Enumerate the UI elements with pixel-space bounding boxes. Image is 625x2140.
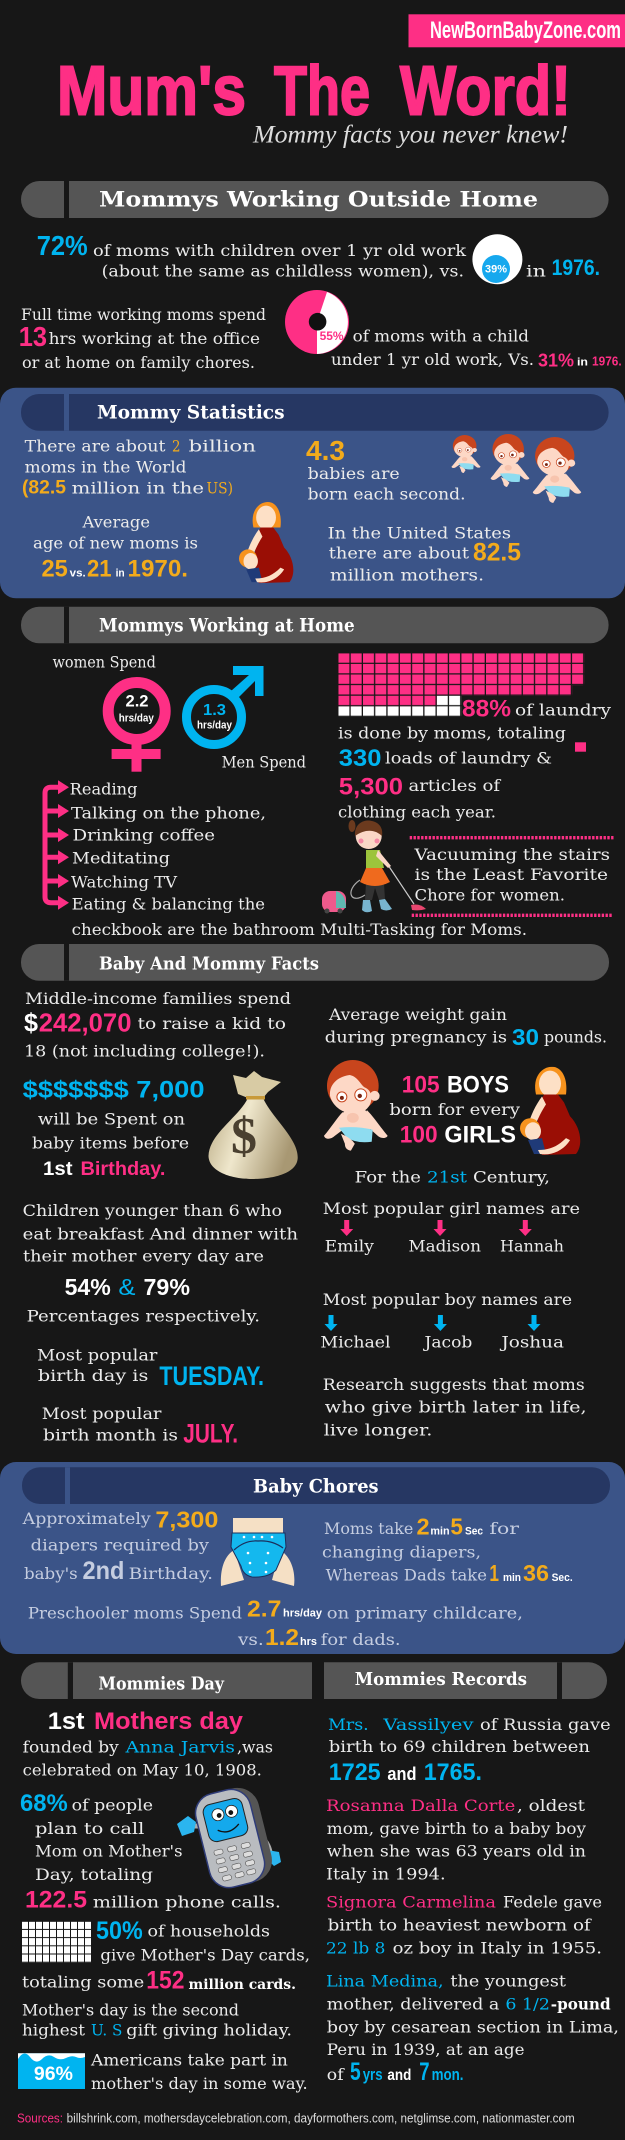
fact: cost to raise a kid: to raise a kid to bbox=[138, 1014, 286, 1033]
fact: cost to raise a kid: $ bbox=[24, 1008, 39, 1038]
fact: greeting cards: give Mother's Day cards, bbox=[100, 1946, 310, 1965]
heading bar: Baby Chores bbox=[253, 1476, 379, 1498]
fact: birth day and month: TUESDAY. bbox=[159, 1361, 264, 1391]
fact: gift giving holiday bbox=[22, 2001, 292, 2040]
fact: phone calls: 122.5 bbox=[25, 1887, 87, 1914]
fact: greeting cards: of households bbox=[148, 1922, 270, 1941]
fact: diaper change times: Sec. bbox=[552, 1572, 573, 1584]
fact: 13 hours: 13 bbox=[19, 321, 47, 352]
record: most children: 1725 bbox=[329, 1759, 381, 1786]
fact: cost to raise a kid: Middle-income families spend bbox=[25, 989, 291, 1008]
fact: diapers required bbox=[22, 1506, 218, 1585]
popular names: Hannah bbox=[500, 1237, 564, 1256]
fact: weight gain: pounds. bbox=[544, 1028, 607, 1047]
record: most children: of Russia gave bbox=[480, 1715, 611, 1734]
fact: diapers required: 2nd bbox=[82, 1557, 124, 1585]
icon: money bag: $ bbox=[231, 1108, 257, 1165]
icon: male symbol bbox=[186, 666, 264, 744]
fact: laundry: is done by moms, totaling bbox=[338, 723, 566, 742]
fact: childcare hours: hrs/day bbox=[283, 1608, 323, 1620]
fact: diaper change times: Whereas Dads take bbox=[326, 1566, 487, 1585]
fact: average age: 1970. bbox=[128, 556, 188, 583]
fact: 4.3 babies: 4.3 bbox=[306, 435, 345, 466]
fact: diaper change times: 36 bbox=[523, 1560, 549, 1586]
icon: male symbol: hrs/day bbox=[197, 719, 233, 731]
fact: birth day and month bbox=[37, 1346, 264, 1449]
fact: phone calls: million phone calls. bbox=[93, 1892, 281, 1911]
fact: laundry bbox=[338, 696, 611, 822]
panel: working at home bbox=[21, 607, 614, 939]
popular names: Michael bbox=[320, 1332, 391, 1351]
record: heaviest newborn: oz boy in Italy in 1955. bbox=[393, 1938, 602, 1957]
fact: 7000 on baby items: baby items before bbox=[32, 1133, 189, 1152]
fact: 13 hours: Full time working moms spend bbox=[21, 305, 266, 324]
icon: girl vacuuming bbox=[322, 820, 426, 914]
fact: laundry: 88% bbox=[462, 696, 511, 723]
heading bar: Mommys Working Outside Home bbox=[99, 187, 538, 212]
fact: diaper change times: Sec bbox=[465, 1525, 483, 1537]
heading bar: Mommies Day bbox=[98, 1673, 224, 1694]
chart: 96 percent box bbox=[18, 2053, 85, 2089]
fact: 72 percent: 1976. bbox=[552, 255, 600, 280]
fact: gift giving holiday: Mother's day is the second bbox=[22, 2001, 239, 2020]
callout: vacuuming: Chore for women. bbox=[414, 886, 565, 905]
record: most children: birth to 69 children between bbox=[329, 1737, 590, 1756]
popular names: For the bbox=[355, 1168, 421, 1187]
fact: 2 billion moms: US) bbox=[206, 478, 233, 497]
fact: phone calls: 68% bbox=[20, 1790, 68, 1817]
fact: 13 hours: or at home on family chores. bbox=[22, 353, 255, 372]
fact: birth day and month: birth month is bbox=[43, 1426, 178, 1445]
fact: 82.5 million mothers: In the United States bbox=[328, 523, 511, 542]
fact: weight gain: 30 bbox=[512, 1024, 539, 1050]
fact: laundry: 5,300 bbox=[339, 773, 403, 800]
record: youngest mother: Lina Medina, bbox=[326, 1972, 444, 1991]
fact: 2 billion moms: There are about bbox=[25, 437, 166, 456]
fact: phone calls: Mom on Mother's bbox=[35, 1842, 182, 1861]
fact: birth day and month: Most popular bbox=[37, 1346, 158, 1365]
fact: americans take part bbox=[90, 2051, 308, 2093]
fact: family meals: & bbox=[118, 1274, 136, 1300]
fact: average age: 25 bbox=[42, 556, 68, 583]
fact: 7000 on baby items bbox=[23, 1077, 205, 1180]
popular names: Century, bbox=[473, 1168, 550, 1187]
fact: gift giving holiday: U. S bbox=[91, 2021, 122, 2040]
fact: family meals: their mother every day are bbox=[23, 1247, 264, 1266]
fact: 2 billion moms: moms in the World bbox=[25, 457, 187, 476]
heading bar bbox=[21, 181, 609, 218]
fact: cost to raise a kid: 242,070 bbox=[39, 1008, 132, 1038]
record: youngest mother: the youngest bbox=[450, 1972, 567, 1991]
record: most children: 1765. bbox=[424, 1759, 482, 1786]
fact: laundry: clothing each year. bbox=[338, 803, 496, 822]
record: oldest mom bbox=[326, 1796, 586, 1883]
popular names: Madison bbox=[408, 1237, 481, 1256]
subtitle: Mommy facts you never knew! bbox=[252, 122, 568, 149]
fact: 82.5 million mothers: 82.5 bbox=[473, 539, 521, 567]
fact: later birth bbox=[323, 1375, 587, 1440]
pie: 55 percent bbox=[285, 290, 349, 354]
record: youngest mother: -pound bbox=[551, 1994, 611, 2013]
fact: 4.3 babies: babies are bbox=[308, 464, 400, 483]
heading bar: Mommys Working at Home bbox=[99, 615, 355, 637]
popular names: 21st bbox=[427, 1168, 468, 1187]
fact: weight gain: Average weight gain bbox=[328, 1005, 507, 1024]
heading bar: Mommy Statistics bbox=[97, 401, 285, 423]
record: youngest mother bbox=[326, 1972, 619, 2086]
fact: americans take part: Americans take part in bbox=[90, 2051, 288, 2070]
fact: 72 percent: of moms with children over 1 yr old work bbox=[93, 241, 466, 260]
fact: family meals: Children younger than 6 who bbox=[23, 1201, 282, 1220]
record: youngest mother: 6 1/2 bbox=[505, 1994, 550, 2013]
fact: diapers required: 7,300 bbox=[155, 1506, 218, 1532]
fact: average age: Average bbox=[81, 512, 150, 531]
fact: later birth: Research suggests that moms bbox=[323, 1375, 585, 1394]
fact: first mothers day: Anna Jarvis bbox=[124, 1738, 235, 1757]
heading bar bbox=[324, 1662, 607, 1699]
record: heaviest newborn bbox=[326, 1893, 602, 1957]
panel: working outside home bbox=[19, 181, 622, 372]
icon: smiling phone bbox=[177, 1783, 281, 1892]
fact: diaper change times: Moms take bbox=[324, 1519, 413, 1538]
record: youngest mother: 7 bbox=[419, 2058, 430, 2086]
chart: 96 percent box: 96% bbox=[34, 2064, 73, 2085]
icon: mother and child bbox=[239, 502, 293, 583]
record: heaviest newborn: birth to heaviest newborn of bbox=[328, 1916, 592, 1935]
fact: laundry: of laundry bbox=[515, 701, 611, 720]
fact: first mothers day: celebrated on May 10, 1908. bbox=[23, 1760, 262, 1779]
icon: female symbol: 2.2 bbox=[126, 692, 148, 711]
fact: diapers required: Approximately bbox=[22, 1509, 151, 1528]
fact: childcare hours: hrs bbox=[300, 1636, 317, 1648]
record: heaviest newborn: 22 lb 8 bbox=[326, 1938, 385, 1957]
icon: money bag bbox=[208, 1071, 298, 1179]
multitasking list bbox=[70, 779, 527, 939]
fact: greeting cards: totaling some bbox=[22, 1973, 144, 1992]
chart: laundry waffle grid bbox=[338, 653, 586, 752]
record: heaviest newborn: Signora Carmelina bbox=[326, 1893, 497, 1912]
fact: laundry: 330 bbox=[339, 745, 381, 772]
fact: average age: vs. bbox=[70, 568, 86, 580]
popular names: Most popular boy names are bbox=[323, 1290, 572, 1309]
fact: childcare hours bbox=[28, 1596, 523, 1650]
fact: 72 percent bbox=[37, 230, 600, 281]
record: youngest mother: and bbox=[387, 2067, 411, 2084]
fact: diapers required: Birthday. bbox=[129, 1564, 213, 1583]
fact: gift giving holiday: gift giving holiday. bbox=[126, 2021, 292, 2040]
icon: baby large bbox=[533, 437, 581, 503]
panel: mommies day bbox=[18, 1662, 312, 2093]
fact: 7000 on baby items: will be Spent on bbox=[38, 1109, 185, 1128]
fact: childcare hours: on primary childcare, bbox=[327, 1603, 523, 1622]
title: Word! bbox=[400, 52, 571, 130]
icon: female symbol: hrs/day bbox=[119, 713, 155, 725]
record: oldest mom: Rosanna Dalla Corte bbox=[326, 1796, 515, 1815]
arrows: girl names bbox=[340, 1220, 532, 1236]
fact: later birth: who give birth later in life, bbox=[325, 1398, 587, 1417]
fact: 55 percent text: 1976. bbox=[592, 354, 622, 369]
fact: diaper change times: min bbox=[430, 1525, 450, 1537]
heading bar bbox=[22, 1467, 610, 1504]
fact: childcare hours: 1.2 bbox=[265, 1624, 299, 1650]
arrows: boy names bbox=[324, 1315, 540, 1331]
fact: 13 hours bbox=[19, 305, 266, 372]
callout: vacuuming: Vacuuming the stairs bbox=[413, 845, 610, 864]
fact: first mothers day: Mothers day bbox=[94, 1708, 244, 1735]
fact: family meals: Percentages respectively. bbox=[27, 1307, 260, 1326]
fact: first mothers day: 1st bbox=[48, 1708, 85, 1735]
fact: phone calls: Day, totaling bbox=[35, 1865, 153, 1884]
popular names: Emily bbox=[325, 1237, 374, 1256]
fact: family meals: 79% bbox=[144, 1274, 190, 1300]
fact: 2 billion moms: million in the bbox=[72, 478, 204, 497]
record: youngest mother: boy by cesarean section in Lima, bbox=[327, 2017, 619, 2036]
multitasking list: checkbook are the bathroom Multi-Tasking for Moms. bbox=[72, 920, 527, 939]
heading bar bbox=[21, 607, 609, 643]
fact: birth day and month: JULY. bbox=[183, 1419, 238, 1449]
icon: mother and child bbox=[520, 1067, 580, 1155]
popular names: Joshua bbox=[499, 1332, 565, 1351]
title: Mum's bbox=[57, 52, 246, 130]
fact: diapers required: baby's bbox=[24, 1564, 78, 1583]
title: The bbox=[274, 52, 370, 130]
fact: family meals bbox=[23, 1201, 298, 1326]
record: most children bbox=[328, 1715, 611, 1786]
fact: birth day and month: birth day is bbox=[38, 1366, 148, 1385]
fact: boys per girls bbox=[389, 1072, 520, 1148]
fact: family meals: 54% bbox=[65, 1274, 111, 1300]
multitasking list: Eating & balancing the bbox=[72, 894, 265, 913]
fact: birth day and month: Most popular bbox=[42, 1404, 162, 1423]
multitasking list: Meditating bbox=[72, 848, 170, 867]
fact: laundry: articles of bbox=[408, 776, 501, 795]
label: men spend: Men Spend bbox=[222, 753, 306, 772]
fact: americans take part: mother's day in some way. bbox=[91, 2074, 308, 2093]
fact: diaper change times: min bbox=[503, 1572, 521, 1584]
icon: baby bbox=[324, 1060, 388, 1151]
heading bar bbox=[21, 944, 609, 981]
heading bar bbox=[21, 1662, 312, 1699]
record: most children: and bbox=[387, 1764, 416, 1784]
heading bar: Mommies Records bbox=[355, 1669, 527, 1690]
fact: 2 billion moms: 2 bbox=[172, 437, 180, 456]
callout: vacuuming: is the Least Favorite bbox=[414, 865, 608, 884]
fact: first mothers day bbox=[23, 1708, 273, 1779]
fact: diaper change times: changing diapers, bbox=[322, 1542, 481, 1561]
fact: phone calls: of people bbox=[72, 1796, 153, 1815]
label: women spend: women Spend bbox=[53, 653, 156, 672]
record: youngest mother: mon. bbox=[432, 2065, 464, 2084]
fact: childcare hours: for dads. bbox=[321, 1630, 401, 1649]
fact: average age: 21 bbox=[87, 556, 112, 583]
panel: baby chores bbox=[0, 1462, 625, 1654]
fact: 2 billion moms: (82.5 bbox=[22, 477, 66, 498]
title bbox=[57, 52, 571, 130]
fact: 2 billion moms bbox=[22, 437, 256, 498]
multitasking list: Talking on the phone, bbox=[71, 803, 266, 822]
icon: baby medium bbox=[491, 434, 529, 487]
fact: diaper change times: 5 bbox=[450, 1513, 463, 1539]
fact: diaper change times: for bbox=[489, 1519, 519, 1538]
icon: white waffle grid bbox=[22, 1922, 92, 1963]
record: oldest mom: Italy in 1994. bbox=[326, 1864, 446, 1883]
fact: 55 percent text: 31% bbox=[538, 351, 574, 371]
fact: 13 hours: hrs working at the office bbox=[49, 329, 260, 348]
fact: 2 billion moms: billion bbox=[188, 437, 256, 456]
multitasking list: Reading bbox=[70, 779, 138, 798]
fact: first mothers day: ,was bbox=[237, 1738, 273, 1757]
fact: gift giving holiday: highest bbox=[22, 2021, 86, 2040]
fact: 7000 on baby items: Birthday. bbox=[80, 1159, 165, 1180]
popular names bbox=[320, 1168, 580, 1351]
fact: 82.5 million mothers bbox=[328, 523, 521, 585]
fact: average age: in bbox=[116, 568, 125, 580]
record: oldest mom: , oldest bbox=[517, 1796, 586, 1815]
fact: greeting cards bbox=[22, 1917, 310, 1994]
fact: weight gain bbox=[325, 1005, 607, 1050]
record: most children: Vassilyev bbox=[382, 1715, 474, 1734]
fact: diaper change times bbox=[322, 1513, 573, 1586]
pie: 39 percent bbox=[472, 234, 522, 284]
fact: phone calls: plan to call bbox=[35, 1819, 144, 1838]
heading bar: Baby And Mommy Facts bbox=[99, 953, 319, 974]
fact: weight gain: during pregnancy is bbox=[325, 1028, 507, 1047]
popular names: Most popular girl names are bbox=[323, 1199, 580, 1218]
fact: diaper change times: 2 bbox=[416, 1513, 430, 1539]
fact: 55 percent text: under 1 yr old work, Vs. bbox=[331, 350, 534, 369]
fact: 82.5 million mothers: there are about bbox=[329, 543, 470, 562]
fact: cost to raise a kid bbox=[24, 989, 291, 1061]
fact: 4.3 babies bbox=[306, 435, 466, 503]
fact: 72 percent: in bbox=[526, 262, 546, 281]
fact: childcare hours: vs. bbox=[237, 1630, 264, 1649]
record: youngest mother: of bbox=[327, 2065, 345, 2084]
fact: childcare hours: 2.7 bbox=[247, 1596, 281, 1622]
sources: billshrink.com, mothersdaycelebration.com, dayformothers.com, netglimse.com, nationmaster.com bbox=[67, 2112, 575, 2126]
multitasking list: Watching TV bbox=[71, 872, 177, 891]
multitasking list: Drinking coffee bbox=[72, 826, 215, 845]
fact: cost to raise a kid: 18 (not including college!). bbox=[24, 1042, 265, 1061]
fact: 82.5 million mothers: million mothers. bbox=[330, 566, 484, 585]
icon: female symbol bbox=[108, 682, 165, 772]
panel: mommy statistics bbox=[0, 388, 625, 598]
panel: baby and mommy facts bbox=[21, 944, 609, 1449]
fact: later birth: live longer. bbox=[324, 1421, 432, 1440]
record: youngest mother: mother, delivered a bbox=[327, 1994, 500, 2013]
icon: diaper bbox=[221, 1518, 294, 1586]
record: oldest mom: when she was 63 years old in bbox=[327, 1842, 586, 1861]
panel: mommies records bbox=[324, 1662, 619, 2086]
record: youngest mother: 5 bbox=[350, 2058, 361, 2086]
fact: 72 percent: (about the same as childless women), vs. bbox=[102, 262, 464, 281]
fact: 55 percent text: in bbox=[577, 357, 588, 369]
fact: average age bbox=[33, 512, 198, 583]
record: youngest mother: Peru in 1939, at an age bbox=[327, 2040, 524, 2059]
fact: boys per girls: 100 bbox=[400, 1121, 438, 1148]
fact: laundry: loads of laundry & bbox=[385, 748, 552, 767]
pie: 55 percent: 55% bbox=[320, 329, 344, 343]
fact: 7000 on baby items: $$$$$$$ 7,000 bbox=[23, 1077, 205, 1104]
fact: boys per girls: BOYS bbox=[447, 1072, 509, 1099]
fact: family meals: eat breakfast And dinner with bbox=[23, 1224, 298, 1243]
fact: average age: age of new moms is bbox=[33, 533, 198, 552]
fact: greeting cards: 152 bbox=[146, 1966, 184, 1994]
fact: 55 percent text bbox=[331, 327, 622, 371]
fact: boys per girls: born for every bbox=[389, 1100, 520, 1119]
record: most children: Mrs. bbox=[328, 1715, 369, 1734]
fact: 55 percent text: of moms with a child bbox=[353, 327, 529, 346]
record: oldest mom: mom, gave birth to a baby boy bbox=[327, 1819, 586, 1838]
fact: greeting cards: million cards. bbox=[188, 1977, 296, 1993]
multitasking bracket arrows bbox=[45, 780, 69, 910]
fact: first mothers day: founded by bbox=[23, 1738, 119, 1757]
fact: phone calls bbox=[20, 1790, 281, 1914]
popular names: Jacob bbox=[422, 1332, 472, 1351]
icon: male symbol: 1.3 bbox=[203, 702, 226, 719]
callout: vacuuming bbox=[410, 838, 614, 915]
fact: 72 percent: 72% bbox=[37, 230, 88, 261]
record: heaviest newborn: Fedele gave bbox=[503, 1893, 602, 1912]
fact: 7000 on baby items: 1st bbox=[43, 1159, 73, 1180]
heading bar bbox=[21, 394, 609, 431]
sources: Sources: bbox=[17, 2112, 63, 2126]
fact: boys per girls: 105 bbox=[402, 1072, 440, 1099]
fact: greeting cards: 50% bbox=[96, 1917, 143, 1945]
pie: 39 percent: 39% bbox=[485, 264, 507, 276]
fact: childcare hours: Preschooler moms Spend bbox=[28, 1603, 242, 1622]
fact: diapers required: diapers required by bbox=[31, 1536, 209, 1555]
fact: 4.3 babies: born each second. bbox=[308, 484, 466, 503]
fact: diaper change times: 1 bbox=[489, 1560, 499, 1586]
fact: boys per girls: GIRLS bbox=[444, 1121, 516, 1148]
icon: baby small bbox=[451, 435, 481, 473]
record: youngest mother: yrs bbox=[363, 2065, 383, 2084]
